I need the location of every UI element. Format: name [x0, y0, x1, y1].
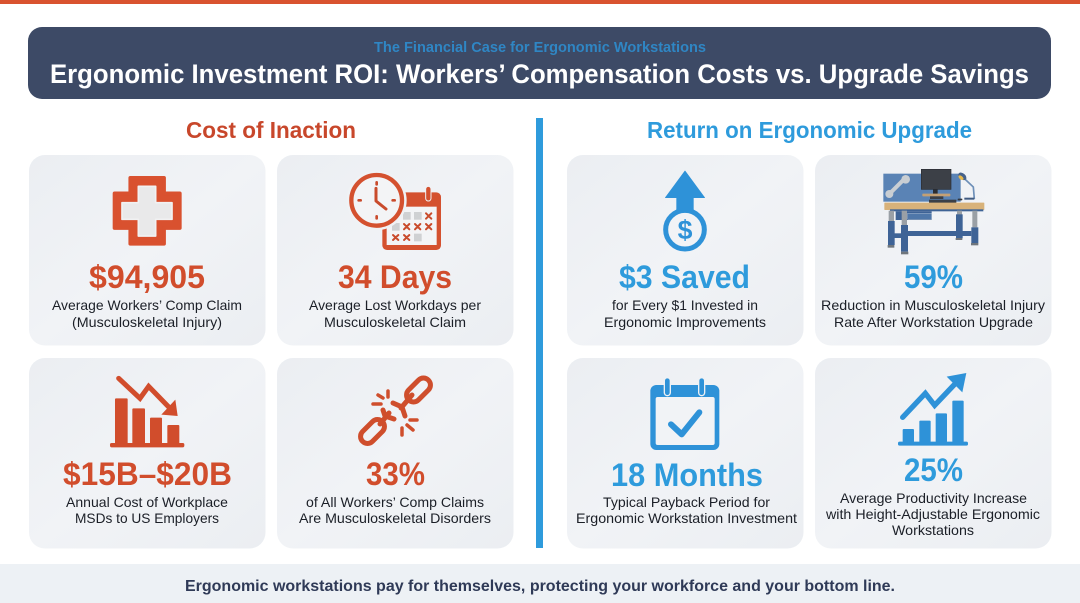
description [299, 494, 491, 526]
description: Are Musculoskeletal Disorders [299, 510, 491, 526]
description [821, 297, 1045, 330]
description [52, 297, 242, 330]
value: $3 Saved [619, 259, 750, 295]
top accent bar [0, 0, 1080, 4]
description: Ergonomic Improvements [604, 314, 766, 330]
value: 18 Months [611, 457, 763, 493]
panel: share of claims [277, 358, 514, 548]
heading: Cost of Inaction: Cost of Inaction [186, 117, 356, 143]
value: $15B–$20B [63, 456, 232, 492]
value: 34 Days [338, 259, 452, 295]
panel: annual MSD cost [29, 358, 266, 548]
heading: Return on Ergonomic Upgrade: Return on Ergonomic Upgrade [647, 117, 972, 143]
description: Annual Cost of Workplace [66, 494, 228, 510]
description: of All Workers’ Comp Claims [306, 494, 484, 510]
description: Musculoskeletal Claim [324, 314, 466, 330]
description: Rate After Workstation Upgrade [834, 314, 1033, 330]
icon: dollar coin with up arrow: $ [678, 215, 693, 245]
title: Ergonomic Investment ROI: Workers’ Compensation Costs vs. Upgrade Savings [50, 59, 1029, 89]
description: Ergonomic Workstation Investment [576, 510, 797, 526]
footer takeaway text: Ergonomic workstations pay for themselves, protecting your workforce and your bottom line. [185, 578, 895, 595]
description: MSDs to US Employers [75, 510, 219, 526]
icon: dollar coin with up arrow [665, 171, 705, 249]
footer banner [0, 564, 1080, 603]
icon: rising bar chart [898, 373, 968, 446]
description: for Every $1 Invested in [612, 297, 758, 313]
description [604, 297, 766, 330]
value: 59% [904, 259, 963, 295]
panel: lost workdays [277, 155, 514, 346]
description [825, 490, 1040, 538]
value: $94,905 [89, 259, 205, 295]
description [66, 494, 228, 526]
panel: payback period [567, 358, 804, 548]
panel: productivity increase [815, 358, 1052, 548]
description: (Musculoskeletal Injury) [72, 314, 222, 330]
icon: ergonomic workbench [883, 169, 984, 254]
value: 33% [366, 456, 425, 492]
description: Typical Payback Period for [603, 494, 770, 510]
icon: broken chain [358, 375, 433, 446]
panel: average claim cost [29, 155, 266, 346]
icon: calendar with check [650, 378, 719, 450]
description [576, 494, 797, 526]
icon: falling bar chart [110, 378, 184, 447]
description: Average Workers’ Comp Claim [52, 297, 242, 313]
subtitle: The Financial Case for Ergonomic Workstations [374, 40, 706, 56]
description [309, 297, 481, 330]
panel: injury rate reduction [815, 155, 1052, 346]
description: with Height-Adjustable Ergonomic [825, 506, 1040, 522]
center divider [536, 118, 543, 548]
description: Average Lost Workdays per [309, 297, 481, 313]
value: 25% [904, 452, 963, 488]
panel: savings per dollar [567, 155, 804, 346]
description: Reduction in Musculoskeletal Injury [821, 297, 1045, 313]
description: Average Productivity Increase [840, 490, 1027, 506]
description: Workstations [892, 522, 974, 538]
icon: clock and calendar [347, 170, 441, 250]
header banner [28, 27, 1051, 99]
icon: medical cross [115, 178, 180, 244]
